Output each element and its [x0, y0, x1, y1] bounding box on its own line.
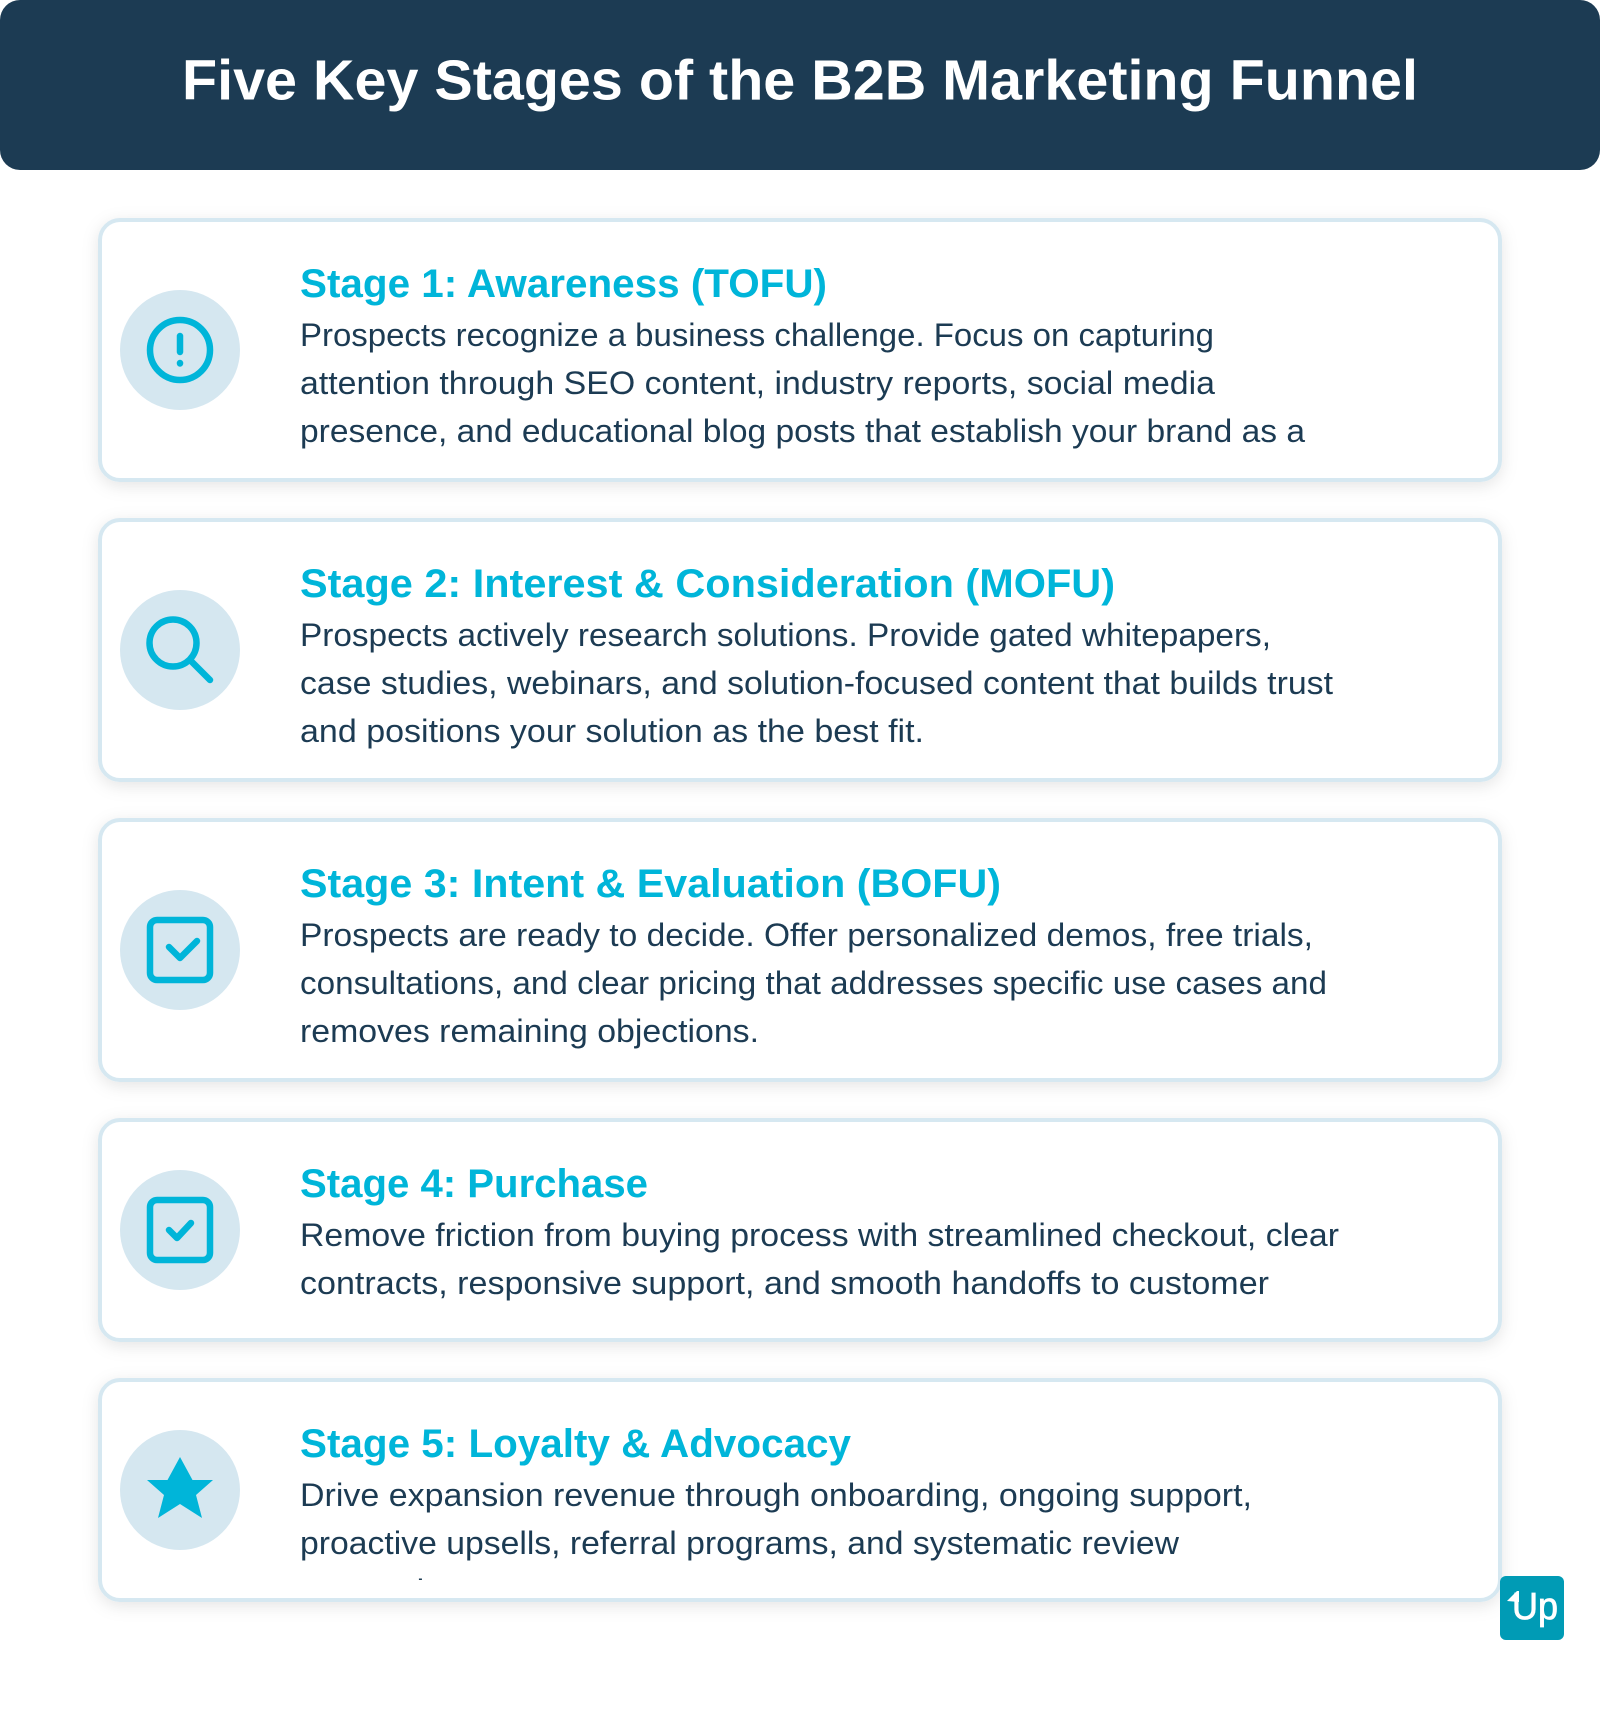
stage 3 description: removes remaining objections. — [300, 1013, 759, 1049]
stage 3 description — [300, 917, 1327, 1049]
panel: stage 2 interest and consideration — [100, 520, 1500, 780]
stage 1 heading: Stage 1: Awareness (TOFU) — [300, 262, 827, 306]
header banner — [0, 0, 1600, 170]
icon: star — [147, 1457, 213, 1518]
stage 4 description: contracts, responsive support, and smooth handoffs to customer — [300, 1265, 1269, 1301]
stage 1 description: attention through SEO content, industry reports, social media — [300, 365, 1216, 401]
stage 2 description — [300, 617, 1333, 749]
icon: checkbox — [150, 920, 210, 980]
stage 5 description: generation. — [300, 1573, 472, 1609]
icon: magnifying glass — [150, 620, 210, 680]
icon: small checkbox — [150, 1200, 210, 1260]
logo badge — [1500, 1576, 1564, 1640]
stage 2 heading: Stage 2: Interest & Consideration (MOFU) — [300, 562, 1115, 606]
panel: stage 5 loyalty and advocacy — [100, 1380, 1500, 1609]
title: Five Key Stages of the B2B Marketing Funnel — [182, 48, 1418, 112]
stage 5 heading: Stage 5: Loyalty & Advocacy — [300, 1422, 852, 1466]
stage 3 description: consultations, and clear pricing that addresses specific use cases and — [300, 965, 1327, 1001]
panel: stage 4 purchase — [100, 1120, 1500, 1340]
stage 1 description — [300, 317, 1306, 449]
stage 4 description — [300, 1217, 1339, 1301]
panel: stage 3 intent and evaluation — [100, 820, 1500, 1080]
stage 2 description: case studies, webinars, and solution-focused content that builds trust — [300, 665, 1333, 701]
icon: alert circle — [150, 320, 210, 380]
stage 2 description: Prospects actively research solutions. Provide gated whitepapers, — [300, 617, 1271, 653]
stage 2 description: and positions your solution as the best fit. — [300, 713, 924, 749]
stage 5 description — [302, 1482, 1249, 1580]
stage 4 heading: Stage 4: Purchase — [300, 1162, 648, 1206]
stage 1 description: Prospects recognize a business challenge. Focus on capturing — [300, 317, 1214, 353]
stage 3 heading: Stage 3: Intent & Evaluation (BOFU) — [300, 862, 1001, 906]
stage 4 description: Remove friction from buying process with streamlined checkout, clear — [300, 1217, 1339, 1253]
logo badge: Up — [1512, 1586, 1558, 1628]
stage 5 description: Drive expansion revenue through onboarding, ongoing support, — [300, 1477, 1252, 1513]
stage 5 description: proactive upsells, referral programs, and systematic review — [300, 1525, 1180, 1561]
stage 3 description: Prospects are ready to decide. Offer personalized demos, free trials, — [300, 917, 1313, 953]
stage 1 description: presence, and educational blog posts that establish your brand as a — [300, 413, 1306, 449]
panel: stage 1 awareness — [100, 220, 1500, 480]
